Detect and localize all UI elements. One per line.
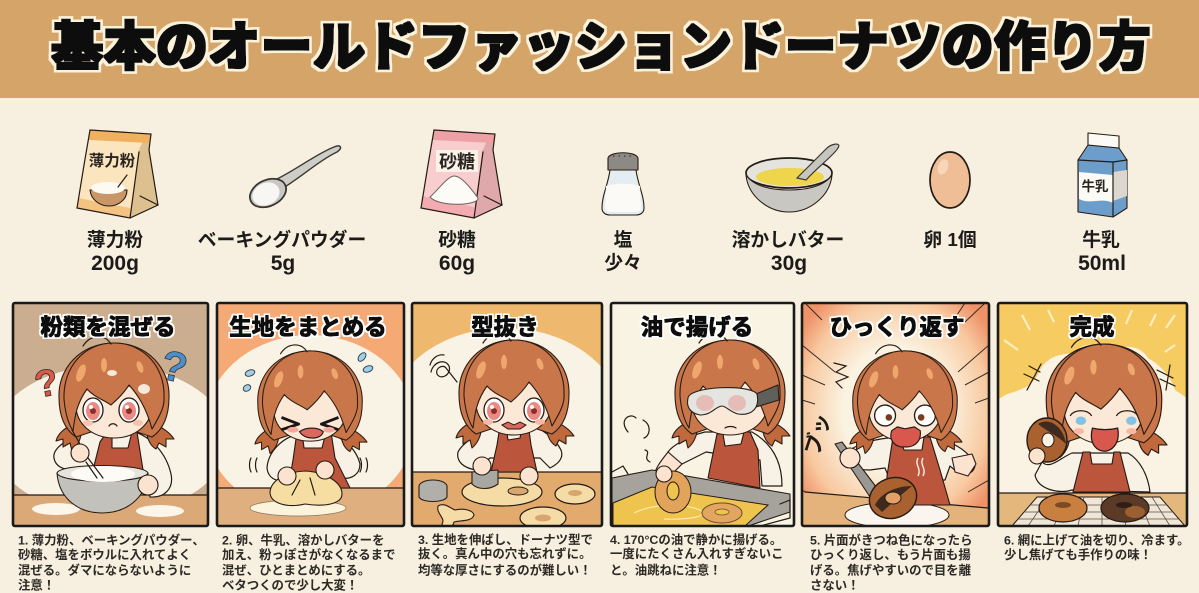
ingredient: salt — [602, 153, 644, 273]
character: girl happy — [1035, 337, 1167, 492]
caption: step 2: 混ぜ、ひとまとめにする。 — [222, 562, 370, 578]
scene: cutting doughnuts — [413, 304, 601, 525]
label: melted butter: 溶かしバター — [732, 229, 844, 250]
icon: flour bag: 薄力粉 — [89, 152, 136, 170]
caption: step 6: 6. 網に上げて油を切り、冷ます。 — [1004, 532, 1190, 548]
title band — [0, 0, 1199, 98]
caption: step 1: 1. 薄力粉、ベーキングパウダー、 — [18, 532, 205, 548]
ingredient: melted butter — [732, 144, 844, 275]
fryer — [612, 466, 790, 526]
sound effect: ブッ — [800, 411, 836, 458]
icon: burnt doughnut on rack — [1101, 494, 1149, 522]
icon: doughnut in oil — [655, 466, 742, 523]
ingredient: egg — [923, 152, 977, 250]
icon: blue question mark: ? — [157, 341, 192, 392]
caption: step 3: 均等な厚さにするのが難しい！ — [418, 562, 592, 578]
caption: step 5: 5. 片面がきつね色になったら — [810, 532, 972, 548]
label: baking powder: ベーキングパウダー — [198, 228, 366, 250]
icon: milk carton — [1078, 133, 1127, 217]
ingredient: flour — [77, 130, 158, 275]
scene: flipping doughnut — [800, 303, 989, 528]
icon: worry spiral — [430, 355, 457, 382]
amount: milk: 50ml — [1078, 252, 1126, 275]
icon: burnt doughnut — [868, 476, 918, 520]
caption: step 6 — [1004, 532, 1190, 562]
amount: baking powder: 5g — [271, 252, 295, 275]
step heading: 生地をまとめる — [229, 315, 387, 340]
character: girl with goggles — [624, 334, 790, 488]
caption: step 5: げる。焦げやすいので目を離 — [810, 562, 972, 578]
character: girl panicking — [835, 345, 976, 505]
panel: step 5 flip — [800, 303, 989, 528]
icon: sugar bag: 砂糖 — [439, 152, 475, 172]
label: milk: 牛乳 — [1082, 229, 1120, 250]
icon: sparkle marks — [1024, 364, 1175, 390]
caption: step 1: 混ぜる。ダマにならないように — [18, 562, 191, 578]
caption: step 3 — [418, 532, 593, 578]
caption: step 2: 加え、粉っぽさがなくなるまで — [222, 547, 395, 562]
caption: step 2: 2. 卵、牛乳、溶かしバターを — [222, 532, 384, 548]
panel: step 6 done — [998, 303, 1187, 526]
ingredient: sugar — [421, 130, 502, 275]
icon: sugar bag — [421, 130, 502, 218]
ingredient: milk — [1078, 133, 1127, 275]
icon: salt shaker — [602, 153, 644, 215]
raw doughnut shapes — [438, 484, 595, 529]
icon: ring cutter — [419, 480, 447, 502]
label: salt: 塩 — [614, 229, 633, 250]
caption: step 2 — [222, 532, 395, 592]
caption: step 1: 砂糖、塩をボウルに入れてよく — [18, 547, 191, 562]
amount: flour: 200g — [91, 252, 139, 275]
caption: step 4 — [610, 532, 783, 578]
caption: step 3: 3. 生地を伸ばし、ドーナツ型で — [418, 532, 593, 547]
icon: milk carton: 牛乳 — [1082, 178, 1109, 194]
character: girl confused — [54, 337, 174, 513]
icon: held doughnut — [1027, 418, 1067, 464]
scene: finished doughnuts — [998, 303, 1187, 526]
scene: mixing flour — [14, 304, 207, 525]
panel: step 4 fry — [611, 303, 794, 526]
caption: step 4: と。油跳ねに注意！ — [610, 562, 722, 578]
scene: kneading dough — [218, 304, 403, 525]
character: girl pressing cutter — [456, 334, 574, 506]
caption: step 1: 注意！ — [18, 578, 55, 592]
icon: butter bowl — [746, 144, 839, 212]
step heading: 粉類を混ぜる — [40, 315, 176, 340]
caption: step 5: ひっくり返し、もう片面も揚 — [810, 547, 971, 562]
scene: frying — [611, 303, 794, 526]
icon: shock squiggle — [834, 363, 848, 388]
label: sugar: 砂糖 — [438, 229, 476, 250]
label: flour: 薄力粉 — [87, 229, 143, 250]
caption: step 2: ベタつくので少し大変！ — [222, 578, 358, 592]
amount: melted butter: 30g — [771, 252, 807, 275]
panel: step 3 cut — [410, 302, 604, 528]
ingredient: baking powder — [198, 146, 366, 275]
step heading: 型抜き — [471, 315, 539, 340]
character: girl struggling — [250, 345, 368, 506]
caption: step 1 — [18, 532, 205, 592]
icon: egg — [930, 152, 970, 208]
amount: sugar: 60g — [439, 252, 475, 275]
icon: sweat drops — [242, 351, 374, 393]
caption: step 5: さない！ — [810, 578, 860, 592]
icon: spoon — [245, 146, 341, 213]
caption: step 4: 一度にたくさん入れすぎないこ — [610, 546, 783, 561]
label: egg: 卵 1個 — [923, 229, 977, 250]
icon: flour bag — [77, 130, 158, 218]
caption: step 3: 抜く。真ん中の穴も忘れずに。 — [418, 546, 591, 561]
panel: step 1 mix — [12, 302, 210, 528]
caption: step 5 — [810, 532, 972, 592]
panel: step 2 knead — [205, 303, 415, 526]
caption: step 6: 少し焦げても手作りの味！ — [1004, 547, 1152, 562]
icon: golden doughnut — [1039, 494, 1087, 522]
step heading: ひっくり返す — [829, 315, 965, 340]
caption: step 4: 4. 170°Cの油で静かに揚げる。 — [610, 532, 782, 547]
amount: salt: 少々 — [604, 252, 642, 273]
icon: red question mark: ? — [31, 361, 63, 407]
cooling rack — [1012, 497, 1185, 526]
step heading: 完成 — [1069, 315, 1115, 340]
title: 基本のオールドファッションドーナツの作り方 — [51, 18, 1151, 77]
step heading: 油で揚げる — [641, 315, 753, 340]
